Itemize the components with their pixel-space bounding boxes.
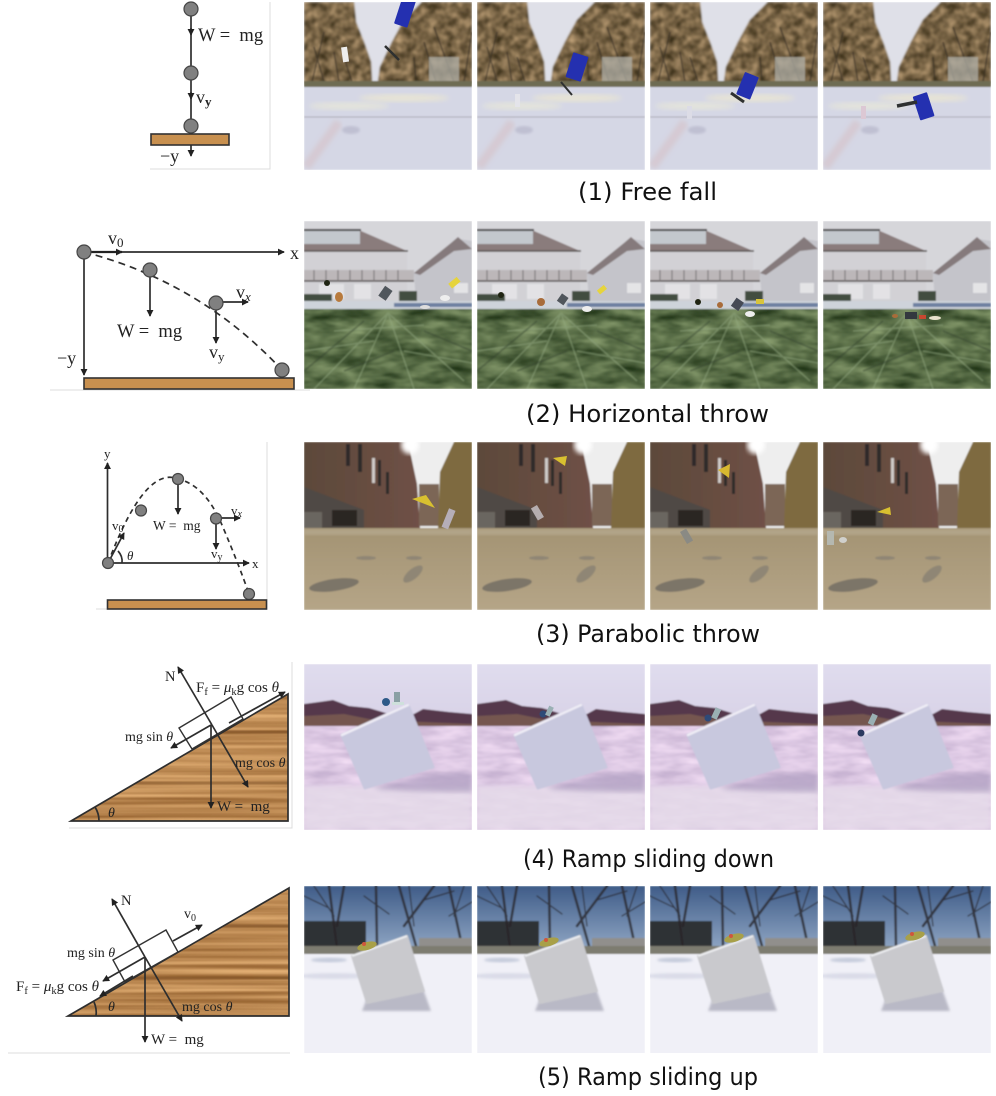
label: vy: y	[218, 349, 225, 364]
label: friction force: μ	[223, 680, 232, 696]
label: friction force: k	[231, 687, 237, 698]
label: vx: x	[236, 509, 242, 520]
label: x axis: x	[290, 243, 299, 263]
diagram: free fall	[150, 2, 270, 169]
label: theta: θ	[108, 1000, 115, 1015]
label: v0: v	[108, 228, 117, 248]
frame: ramp sliding down 1	[304, 664, 472, 830]
frame: free fall 4	[823, 2, 991, 170]
label: velocity y: y	[205, 94, 212, 109]
frame: horizontal throw 2	[477, 221, 645, 389]
frame: free fall 1	[304, 2, 472, 170]
label: velocity y: v	[196, 87, 205, 107]
caption: parabolic throw: (3) Parabolic throw	[536, 620, 760, 648]
label: friction force: k	[51, 986, 57, 997]
label: mg sin: mg sin θ	[67, 946, 115, 961]
diagram: horizontal throw	[50, 228, 310, 390]
label: v0: 0	[118, 524, 124, 535]
label: friction force: F	[196, 680, 204, 696]
frame: ramp sliding up 3	[650, 886, 818, 1053]
caption: ramp sliding up: (5) Ramp sliding up	[538, 1063, 758, 1091]
label: vy: v	[209, 342, 218, 362]
diagram: ramp sliding down	[60, 662, 292, 828]
label: friction force: μ	[43, 979, 52, 995]
label: weight: W = mg	[151, 1032, 204, 1048]
label: mg cos: mg cos θ	[182, 1000, 233, 1015]
frame: ramp sliding up 4	[823, 886, 991, 1053]
label: weight: W = mg	[217, 799, 270, 815]
label: v0: v	[112, 518, 118, 533]
frame: ramp sliding up 1	[304, 886, 472, 1053]
label: negative y: −y	[57, 348, 76, 368]
label: friction force: =	[28, 979, 44, 995]
frame: ramp sliding up 2	[477, 886, 645, 1053]
label: friction force: f	[204, 687, 208, 698]
label: v0: v	[184, 907, 191, 922]
label: v0: 0	[117, 235, 124, 250]
caption: horizontal throw: (2) Horizontal throw	[526, 400, 769, 428]
label: vy: y	[218, 552, 222, 563]
label: normal force: N	[165, 669, 176, 685]
label: mg sin: mg sin θ	[125, 730, 173, 745]
caption: free fall: (1) Free fall	[578, 178, 717, 206]
frame: ramp sliding down 3	[650, 664, 818, 830]
label: x axis: x	[252, 556, 259, 571]
frame: parabolic throw 1	[304, 442, 472, 610]
frame: free fall 2	[477, 2, 645, 170]
label: normal force: N	[121, 893, 132, 909]
label: friction force: g cos	[237, 680, 272, 696]
frame: parabolic throw 3	[650, 442, 818, 610]
frame: horizontal throw 3	[650, 221, 818, 389]
label: weight: W = mg	[117, 322, 182, 342]
label: vx: v	[236, 282, 245, 302]
label: vx: v	[231, 503, 238, 518]
frame: horizontal throw 1	[304, 221, 472, 389]
label: theta: θ	[127, 548, 134, 563]
label: theta: θ	[108, 806, 115, 821]
diagram: parabolic throw	[96, 442, 267, 609]
label: friction force: f	[24, 986, 28, 997]
frame: parabolic throw 4	[823, 442, 991, 610]
frame: ramp sliding down 4	[823, 664, 991, 830]
label: weight: W = mg	[153, 518, 201, 533]
label: friction force: g cos	[57, 979, 92, 995]
label: friction force: =	[208, 680, 224, 696]
label: negative y: −y	[160, 146, 179, 166]
label: vx: x	[244, 289, 251, 304]
label: mg cos: mg cos θ	[235, 756, 286, 771]
label: vy: v	[211, 546, 218, 561]
diagram: ramp sliding up	[8, 888, 290, 1053]
frame: ramp sliding down 2	[477, 664, 645, 830]
caption: ramp sliding down: (4) Ramp sliding down	[523, 845, 774, 873]
frame: horizontal throw 4	[823, 221, 991, 389]
label: friction force: θ	[272, 680, 280, 696]
label: weight: W = mg	[198, 26, 263, 46]
frame: parabolic throw 2	[477, 442, 645, 610]
label: friction force: θ	[92, 979, 100, 995]
label: v0: 0	[191, 913, 196, 924]
frame: free fall 3	[650, 2, 818, 170]
label: y axis: y	[104, 446, 111, 461]
label: friction force: F	[16, 979, 24, 995]
